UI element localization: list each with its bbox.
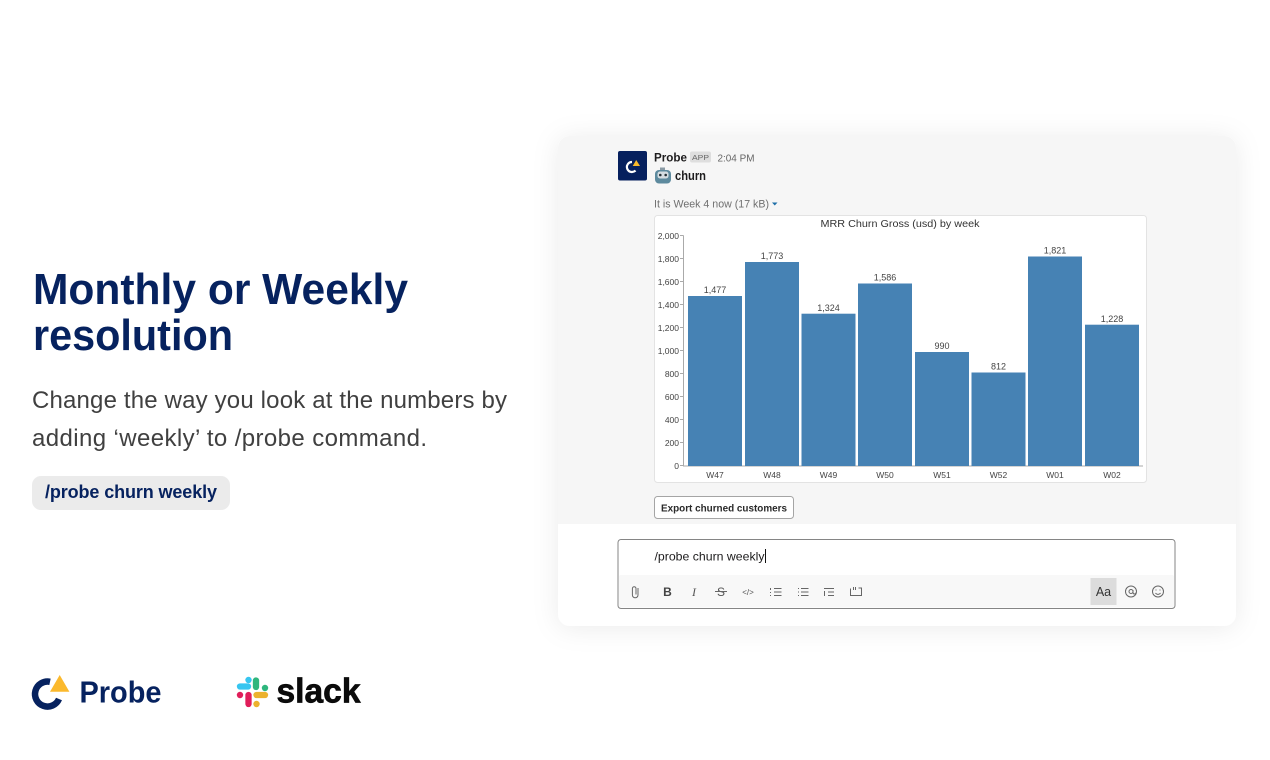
message input (618, 540, 1175, 608)
title (33, 265, 409, 360)
icon: robot emoji (655, 168, 671, 184)
y axis: 0 (674, 461, 679, 471)
bar values: 1,821 (1044, 246, 1066, 256)
export button (654, 496, 794, 518)
formatting toolbar icons: S (717, 585, 725, 599)
x axis labels: W48 (763, 470, 781, 480)
y axis: 1,200 (658, 323, 679, 333)
bar values: 990 (934, 341, 950, 351)
bars (688, 256, 1139, 466)
bar values: 812 (991, 362, 1006, 372)
title: resolution (33, 311, 233, 360)
x axis labels: W49 (820, 470, 838, 480)
y axis: 1,600 (658, 277, 679, 287)
y axis: 2,000 (658, 231, 679, 241)
title: Monthly or Weekly (33, 265, 409, 314)
message header (654, 150, 754, 164)
formatting toolbar icons: B (663, 585, 672, 599)
x axis labels (706, 470, 1121, 480)
bar values: 1,228 (1101, 314, 1123, 324)
y axis: 800 (665, 369, 679, 379)
x axis labels: W01 (1046, 470, 1064, 480)
panel: slack window (558, 136, 1236, 626)
input text: /probe churn weekly (654, 550, 764, 564)
description text: adding ‘weekly’ to /probe command. (32, 425, 427, 452)
description text (32, 387, 507, 452)
logo: slack: slack (276, 672, 361, 710)
export button: Export churned customers (661, 502, 787, 514)
y axis: 1,000 (658, 346, 679, 356)
bar chart (654, 216, 1146, 482)
description text: Change the way you look at the numbers by (32, 387, 507, 414)
icon: emoji (1152, 586, 1164, 597)
bar values: 1,477 (704, 285, 726, 295)
y axis: 1,400 (658, 300, 679, 310)
bar values: 1,586 (874, 272, 896, 282)
message header: APP (692, 153, 709, 162)
logo: probe: Probe (80, 674, 162, 710)
y axis: 1,800 (658, 254, 679, 264)
x axis labels: W02 (1103, 470, 1121, 480)
file label: It is Week 4 now (17 kB) (654, 198, 769, 210)
x axis labels: W51 (933, 470, 951, 480)
message header: Probe (654, 150, 687, 164)
y axis: 200 (665, 438, 679, 448)
command pill: /probe churn weekly (45, 482, 217, 502)
bar values: 1,324 (817, 303, 840, 313)
message input: Aa (1096, 585, 1111, 599)
y axis: 400 (665, 415, 679, 425)
bar values (704, 246, 1123, 372)
text size button (1090, 578, 1116, 605)
formatting toolbar icons (632, 585, 862, 599)
y axis: 600 (665, 392, 679, 402)
bar values: 1,773 (761, 251, 783, 261)
logo: probe (35, 674, 162, 710)
x axis labels: W47 (706, 470, 724, 480)
chart title: MRR Churn Gross (usd) by week (820, 218, 980, 230)
formatting toolbar icons: I (691, 585, 697, 599)
x axis labels: W50 (876, 470, 894, 480)
logo: slack (237, 672, 361, 710)
icon: probe app avatar (618, 151, 647, 180)
x axis labels: W52 (990, 470, 1008, 480)
message header: 2:04 PM (718, 152, 754, 164)
formatting toolbar icons: </> (742, 588, 754, 597)
command pill (32, 476, 230, 510)
y axis (658, 231, 1143, 471)
message text: churn (675, 169, 706, 183)
icon: mention (1126, 586, 1136, 597)
